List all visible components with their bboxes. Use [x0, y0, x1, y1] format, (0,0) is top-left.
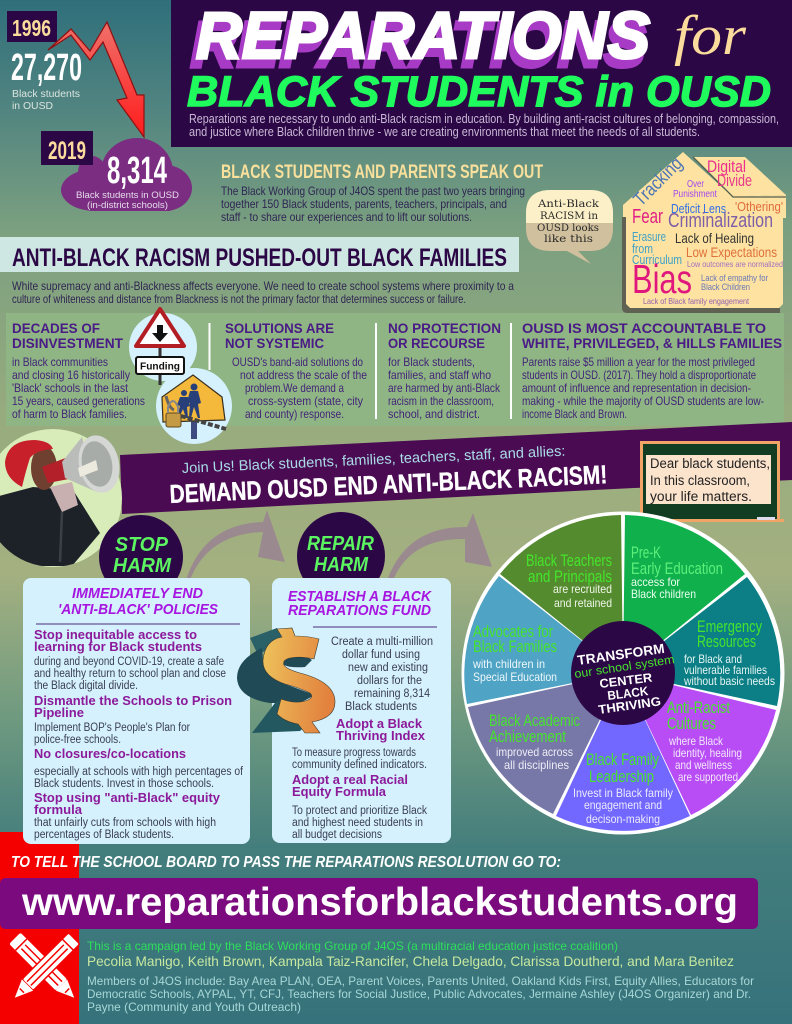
column: no protection or recourse: families, and staff who: [388, 368, 491, 382]
heading: BLACK STUDENTS AND PARENTS SPEAK OUT: [221, 162, 543, 183]
item list: all budget decisions: [292, 829, 382, 841]
segment: anti-racist cultures: are supported: [678, 770, 738, 784]
house word cloud: Lack of empathy for: [701, 273, 768, 284]
intro paragraph: [189, 112, 779, 139]
segment: Black academic achievement: Black Academic: [489, 711, 580, 730]
banner: demand OUSD end anti-Black racism: [120, 422, 792, 514]
stat: 1996 enrolment: 27,270: [11, 47, 82, 89]
stat: 1996 enrolment: [7, 11, 82, 112]
segment: advocates for Black families: Special Education: [473, 670, 557, 684]
segment: advocates for Black families: [464, 576, 623, 704]
house word cloud: Divide: [717, 171, 752, 190]
text block: white supremacy: culture of whiteness and distance from Blackness is not the primary factor that determines success or failure.: [12, 292, 466, 306]
item list: and healthy return to school plan and close: [34, 668, 226, 680]
item list: Adopt a real Racial: [292, 773, 408, 787]
column: decades of disinvestment: in Black communities: [12, 355, 108, 369]
speech bubble: Anti-Black: [537, 198, 600, 210]
column: decades of disinvestment: DISINVESTMENT: [12, 336, 124, 351]
wheel chart: transform our school system: [462, 512, 784, 834]
credits: Members of J4OS include: Bay Area PLAN, OEA, Parent Voices, Parents United, Oakland Kids First, Equity Allies, Educators for: [87, 974, 754, 988]
house word cloud: Bias: [632, 256, 692, 302]
segment: anti-racist cultures: and wellness: [675, 758, 732, 772]
item list: that unfairly cuts from schools with high: [34, 817, 216, 829]
column: OUSD most accountable: income Black and Brown.: [522, 407, 627, 421]
stat: 2019 cloud: Black students in OUSD: [76, 190, 179, 201]
segment: anti-racist cultures: where Black: [668, 734, 724, 748]
column: no protection or recourse: NO PROTECTION: [388, 321, 501, 336]
segment: Black family leadership: [556, 673, 690, 831]
chalkboard: In this classroom,: [650, 473, 750, 488]
badge: repair harm: [297, 512, 385, 600]
house word cloud: 'Othering': [735, 200, 783, 214]
segment: emergency resources: without basic needs: [683, 674, 775, 688]
segment: advocates for Black families: Advocates for: [473, 622, 553, 641]
item list: Pipeline: [34, 706, 84, 720]
item list: To measure progress towards: [292, 747, 416, 759]
item list: during and beyond COVID-19, create a safe: [34, 656, 224, 668]
item list: percentages of Black students.: [34, 829, 174, 841]
item list: and highest need students in: [292, 817, 423, 829]
badge: repair harm: REPAIR: [307, 533, 374, 555]
arrow: stop harm to repair harm: [186, 510, 285, 580]
item list: To protect and prioritize Black: [292, 805, 427, 817]
segment: Black academic achievement: [468, 673, 623, 814]
icon: funding sign and locked school sign: [129, 309, 232, 444]
segment: Pre-K early education: Pre-K: [631, 543, 661, 562]
text block: white supremacy: [12, 279, 514, 306]
stat: 1996 enrolment: 1996: [12, 15, 51, 41]
item list: Black students: [345, 701, 417, 713]
icon: crossed pencils: [9, 933, 80, 1003]
section: Black students and parents speak out: [221, 162, 543, 224]
item list: new and existing: [348, 662, 428, 674]
speech bubble: OUSD looks: [537, 222, 599, 234]
badge: repair harm: HARM: [314, 554, 369, 576]
item list: Thriving Index: [336, 729, 425, 743]
intro paragraph: and justice where Black children thrive - we are creating environments that meet the needs of all students.: [189, 125, 700, 139]
banner: anti-Black racism pushed out Black families: ANTI-BLACK RACISM PUSHED-OUT BLACK FAMILIES: [12, 244, 507, 272]
item list: [34, 628, 244, 841]
segment: Black teachers and principals: and retained: [554, 596, 612, 610]
badge: stop harm: STOP: [115, 534, 169, 556]
house word cloud: Deficit Lens: [671, 201, 726, 216]
house word cloud: Lack of Black family engagement: [643, 296, 750, 306]
house word cloud: Black Children: [701, 282, 750, 293]
segment: anti-racist cultures: [623, 673, 776, 815]
item list: Create a multi-million: [331, 636, 433, 648]
segment: anti-racist cultures: Cultures: [667, 714, 716, 733]
title panel: [171, 0, 792, 147]
text block: together 150 Black students, parents, teachers, principals, and: [221, 197, 507, 211]
title: Reparations: REPARATIONS: [196, 0, 650, 72]
badge: stop harm: HARM: [113, 555, 172, 577]
icon: dollar sign: [237, 628, 335, 733]
heading: [288, 588, 432, 619]
house word cloud: Curriculum: [632, 252, 682, 267]
heading: 'ANTI-BLACK' POLICIES: [58, 601, 218, 618]
column: solutions are not systemic: problem.We demand a: [245, 381, 344, 395]
URL bar: www.reparationsforblackstudents.org: [21, 881, 738, 924]
title: for: for: [674, 5, 746, 67]
heading: IMMEDIATELY END: [72, 585, 203, 602]
item list: remaining 8,314: [354, 688, 431, 700]
house word cloud: Fear: [632, 206, 663, 228]
item list: Stop inequitable access to: [34, 628, 197, 642]
segment: Pre-K early education: [623, 515, 745, 673]
column: no protection or recourse: are harmed by anti-Black: [388, 381, 501, 395]
chalkboard: Dear black students,: [650, 456, 770, 471]
chalkboard: [636, 441, 784, 522]
segment: Black teachers and principals: and Principals: [528, 567, 612, 586]
arrow: repair harm to transform: [388, 513, 492, 578]
segment: anti-racist cultures: identity, healing: [673, 746, 742, 760]
segment: emergency resources: [623, 577, 780, 706]
column: OUSD most accountable: WHITE, PRIVILEGED, & HILLS FAMILIES: [522, 336, 782, 351]
credits: Democratic Schools, AYPAL, YT, CFJ, Teachers for Social Justice, Public Advocates, Jermaine Ashley (J4OS Organizer) and Dr.: [87, 987, 751, 1001]
item list: Adopt a Black: [336, 717, 422, 731]
column: decades of disinvestment: 15 years, caused generations: [12, 394, 145, 408]
segment: emergency resources: Emergency: [697, 617, 762, 636]
column: solutions are not systemic: NOT SYSTEMIC: [225, 336, 324, 351]
column: decades of disinvestment: and closing 16 historically: [12, 368, 130, 382]
column: no protection or recourse: OR RECOURSE: [388, 336, 485, 351]
house word cloud: Punishment: [673, 189, 717, 200]
segment: Black academic achievement: all disciplines: [504, 758, 569, 772]
segment: Black family leadership: Leadership: [589, 767, 654, 786]
stat: 2019 cloud: (in-district schools): [87, 200, 168, 211]
column: solutions are not systemic: SOLUTIONS ARE: [225, 321, 334, 336]
item list: dollars for the: [357, 675, 422, 687]
segment: emergency resources: Resources: [697, 632, 756, 651]
item list: police-free schools.: [34, 734, 121, 746]
photo: protester with megaphone: [0, 429, 125, 567]
text block: staff - to share our experiences and to lift our solutions.: [221, 210, 472, 224]
wheel centre: TRANSFORM: [576, 641, 666, 668]
text block: [221, 184, 525, 224]
column: OUSD most accountable: [522, 321, 782, 421]
column: no protection or recourse: for Black students,: [388, 355, 475, 369]
segment: Black family leadership: engagement and: [584, 798, 662, 812]
text block: The Black Working Group of J4OS spent the past two years bringing: [221, 184, 525, 198]
column: no protection or recourse: [388, 321, 501, 421]
segment: advocates for Black families: with children in: [472, 657, 545, 671]
wheel centre: BLACK: [607, 684, 649, 703]
column: solutions are not systemic: not address the scale of the: [240, 368, 367, 382]
column: decades of disinvestment: 'Black' schools in the last: [12, 381, 129, 395]
item list: the Black digital divide.: [34, 680, 138, 692]
chalkboard: your life matters.: [650, 489, 752, 504]
speech bubble: like this: [544, 233, 593, 245]
column: OUSD most accountable: amount of influence and representation in decision-: [522, 381, 751, 395]
segment: Black family leadership: Black Family: [586, 750, 659, 769]
column: solutions are not systemic: and county) response.: [245, 407, 344, 421]
house word cloud: Over: [687, 179, 705, 190]
segment: Black family leadership: Invest in Black family: [573, 786, 673, 800]
segment: Black teachers and principals: are recruited: [553, 582, 612, 596]
item list: Black students. Invest in those schools.: [34, 778, 214, 790]
item list: No closures/co-locations: [34, 747, 186, 761]
item list: dollar fund using: [342, 649, 420, 661]
house word cloud: Erasure: [632, 229, 666, 244]
segment: anti-racist cultures: Anti-Racist: [667, 698, 730, 717]
column: OUSD most accountable: OUSD IS MOST ACCOUNTABLE TO: [522, 321, 766, 336]
segment: Black academic achievement: improved across: [496, 745, 573, 759]
house word cloud: Lack of Healing: [675, 230, 754, 246]
item list: Dismantle the Schools to Prison: [34, 694, 232, 708]
column: solutions are not systemic: OUSD's band-aid solutions do: [232, 355, 363, 369]
heading: REPARATIONS FUND: [288, 602, 431, 619]
stat: 2019 cloud: [41, 131, 192, 211]
segment: Black teachers and principals: Black Teachers: [526, 551, 612, 570]
segment: Black family leadership: decison-making: [586, 812, 660, 826]
segment: emergency resources: for Black and: [684, 652, 742, 666]
column: decades of disinvestment: DECADES OF: [12, 321, 100, 336]
house word cloud: Digital: [707, 157, 746, 176]
wheel centre: [571, 621, 675, 725]
credits: [87, 939, 754, 1014]
column: solutions are not systemic: [225, 321, 367, 421]
heading: ESTABLISH A BLACK: [288, 588, 432, 605]
panel: immediately end anti-Black policies: [23, 578, 250, 844]
wheel centre: CENTER: [599, 671, 653, 691]
column: solutions are not systemic: cross-system (state, city: [248, 394, 363, 408]
column: no protection or recourse: school, and district.: [388, 407, 480, 421]
speech bubble: RACISM in: [540, 210, 598, 222]
badge: stop harm: [99, 515, 183, 599]
house word cloud: Tracking: [630, 153, 687, 211]
item list: Implement BOP's People's Plan for: [34, 722, 190, 734]
segment: Black academic achievement: Achievement: [489, 727, 566, 746]
heading: [58, 585, 218, 618]
segment: emergency resources: vulnerable families: [684, 663, 767, 677]
column: decades of disinvestment: of harm to Black families.: [12, 407, 127, 421]
stat: 1996 enrolment: in OUSD: [12, 101, 53, 112]
panel: four causes: [6, 313, 784, 426]
headline: DEMAND OUSD END ANTI-BLACK RACISM!: [169, 459, 608, 509]
segment: Pre-K early education: Early Education: [631, 559, 723, 578]
stat: 2019 cloud: 2019: [48, 137, 86, 165]
icon: falling red arrow: [48, 22, 144, 137]
stat: 1996 enrolment: Black students: [12, 89, 80, 100]
wheel centre: our school system: [573, 652, 675, 681]
segment: advocates for Black families: Black Families: [473, 637, 557, 656]
call to action: TO TELL THE SCHOOL BOARD TO PASS THE REPARATIONS RESOLUTION GO TO:: [11, 854, 561, 871]
segment: Black teachers and principals: [500, 515, 623, 673]
banner: anti-Black racism pushed out Black families: [0, 237, 519, 272]
text block: white supremacy: White supremacy and anti-Blackness affects everyone. We need to create school systems where proximity to a: [12, 279, 514, 293]
title: Reparations: REPARATIONS: [190, 7, 646, 81]
credits: This is a campaign led by the Black Working Group of J4OS (a multiracial education justice coalition): [87, 939, 618, 953]
title: Black students in OUSD: BLACK STUDENTS in OUSD: [187, 68, 771, 116]
wheel centre: THRIVING: [597, 694, 662, 717]
icon: funding sign and locked school sign: Funding: [140, 360, 180, 372]
panel: establish a Black reparations fund: [272, 578, 451, 843]
house word cloud: [622, 152, 786, 313]
item list: Equity Formula: [292, 785, 387, 799]
item list: [292, 636, 433, 841]
item list: formula: [34, 803, 83, 817]
red sidebar: [0, 832, 79, 1024]
segment: Pre-K early education: access for: [631, 575, 680, 589]
item list: community defined indicators.: [292, 759, 427, 771]
credits: Payne (Community and Youth Outreach): [87, 1000, 301, 1014]
item list: learning for Black students: [34, 640, 202, 654]
invitation line: Join Us! Black students, families, teachers, staff, and allies:: [181, 444, 566, 477]
credits: Pecolia Manigo, Keith Brown, Kampala Taiz-Rancifer, Chela Delgado, Clarissa Doutherd, and Mara Benitez: [87, 953, 734, 969]
house word cloud: from: [632, 241, 653, 256]
item list: especially at schools with high percentages of: [34, 766, 244, 778]
column: decades of disinvestment: [12, 321, 145, 421]
segment: Pre-K early education: Black children: [631, 587, 696, 601]
column: no protection or recourse: racism in the classroom,: [388, 394, 494, 408]
speech bubble: [526, 190, 613, 264]
stat: 2019 cloud: 8,314: [107, 150, 167, 192]
item list: Stop using "anti-Black" equity: [34, 791, 220, 805]
